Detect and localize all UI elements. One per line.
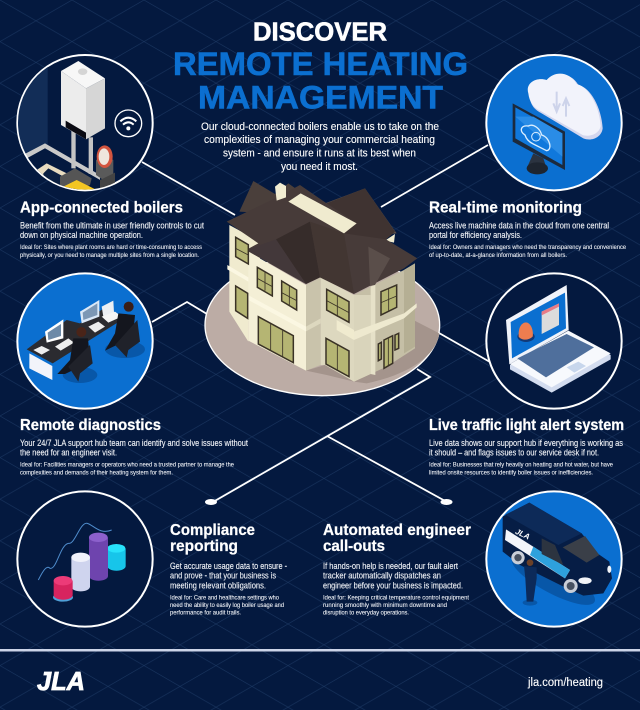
panel: Automated engineer call-outs: Ideal for: Keeping critical temperature control equipment xyxy=(323,594,469,602)
panel: Automated engineer call-outs xyxy=(323,522,471,616)
panel: Remote diagnostics: Remote diagnostics xyxy=(20,417,161,434)
title: MANAGEMENT xyxy=(198,80,443,116)
intro text: Our cloud-connected boilers enable us to take on the xyxy=(201,121,439,133)
panel: App-connected boilers: App-connected boilers xyxy=(20,200,183,216)
icon: compliance chart circle xyxy=(17,491,153,627)
main roof xyxy=(227,185,417,294)
panel: Live traffic light alert system: Live traffic light alert system xyxy=(429,417,624,434)
icon: van circle xyxy=(486,491,622,627)
back roofs xyxy=(239,181,303,213)
panel: Live traffic light alert system xyxy=(429,417,624,476)
panel: Compliance reporting: and prove - that your business is xyxy=(170,570,276,580)
white bar xyxy=(71,553,90,591)
chimney xyxy=(275,183,286,201)
panel: Automated engineer call-outs: call-outs xyxy=(323,538,385,555)
JLA logo: JLA xyxy=(37,666,85,696)
panel: Real-time monitoring: Real-time monitoring xyxy=(429,200,582,216)
panel: Automated engineer call-outs: disruption to everyday operations. xyxy=(323,610,409,616)
footer divider xyxy=(0,649,640,652)
title: DISCOVER xyxy=(253,16,387,46)
panel: Automated engineer call-outs: engineer before your business is impacted. xyxy=(323,580,463,590)
panel: App-connected boilers xyxy=(20,200,204,259)
panel: Live traffic light alert system: limited onsite resources to identify boiler issues or inefficiencies. xyxy=(429,470,593,476)
connector lines xyxy=(142,145,490,505)
panel: Compliance reporting: need the ability to easily log boiler usage and xyxy=(170,602,284,609)
panel: Real-time monitoring xyxy=(429,200,626,259)
icon: cloud monitoring circle xyxy=(486,55,622,190)
disc xyxy=(205,254,440,396)
intro text xyxy=(201,121,439,173)
icon: laptop circle xyxy=(486,273,622,409)
panel: Compliance reporting: performance for audit trails. xyxy=(170,610,241,616)
panel: Compliance reporting: Compliance xyxy=(170,522,255,539)
panel: Remote diagnostics: the need for an engineer visit. xyxy=(20,448,117,458)
panel: Compliance reporting: meeting relevant obligations. xyxy=(170,580,266,590)
panel: Remote diagnostics xyxy=(20,417,248,476)
central house illustration xyxy=(205,181,440,396)
panel: Automated engineer call-outs: If hands-on help is needed, our fault alert xyxy=(323,561,458,571)
intro text: you need it most. xyxy=(281,161,358,173)
panel: App-connected boilers: Ideal for: Sites where plant rooms are hard or time-consuming to access xyxy=(20,244,202,251)
purple bar xyxy=(89,533,108,581)
title xyxy=(173,16,468,116)
intro text: system - and ensure it runs at its best when xyxy=(223,148,416,160)
panel: Remote diagnostics: Your 24/7 JLA support hub team can identify and solve issues without xyxy=(20,438,248,448)
cornice bands xyxy=(227,265,248,282)
panel: Real-time monitoring: of up-to-date, at-a-glance information from all boilers. xyxy=(429,252,567,259)
icon: boiler circle xyxy=(13,53,153,200)
walls xyxy=(229,225,260,342)
intro text: complexities of managing your commercial heating xyxy=(204,134,435,146)
pink bar xyxy=(53,576,73,602)
panel: Compliance reporting xyxy=(170,522,287,616)
panel: Compliance reporting: reporting xyxy=(170,538,238,555)
roof ridge xyxy=(288,193,357,233)
cyan bar xyxy=(107,544,126,571)
website url: jla.com/heating xyxy=(527,677,603,689)
panel: Live traffic light alert system: Ideal for: Businesses that rely heavily on heating and hot water, but have xyxy=(429,462,613,468)
panel: Automated engineer call-outs: Automated engineer xyxy=(323,522,471,539)
title: REMOTE HEATING xyxy=(173,46,468,82)
icon: remote diagnostics circle xyxy=(17,273,153,409)
panel: Real-time monitoring: portal for efficiency analysis. xyxy=(429,230,522,240)
panel: Remote diagnostics: complexities and demands of their heating system for them. xyxy=(20,470,173,476)
van body xyxy=(503,503,612,596)
panel: Automated engineer call-outs: tracker automatically dispatches an xyxy=(323,570,441,580)
panel: App-connected boilers: Benefit from the ultimate in user friendly controls to cut xyxy=(20,220,204,230)
panel: Compliance reporting: Ideal for: Care and healthcare settings who xyxy=(170,594,279,602)
windows xyxy=(236,237,399,377)
panel: App-connected boilers: physically, or you need to manage multiple sites from a single location. xyxy=(20,252,199,259)
panel: Compliance reporting: Get accurate usage data to ensure - xyxy=(170,561,287,571)
panel: Live traffic light alert system: it should – and flags issues to our service desk if not. xyxy=(429,448,599,458)
panel: App-connected boilers: down on physical machine operation. xyxy=(20,230,143,240)
icon: wifi xyxy=(115,110,142,137)
panel: Automated engineer call-outs: running smoothly with minimum downtime and xyxy=(323,602,447,609)
icon: van circle: JLA xyxy=(514,527,532,542)
panel: Remote diagnostics: Ideal for: Facilities managers or operators who need a trusted partner to manage the xyxy=(20,462,234,468)
